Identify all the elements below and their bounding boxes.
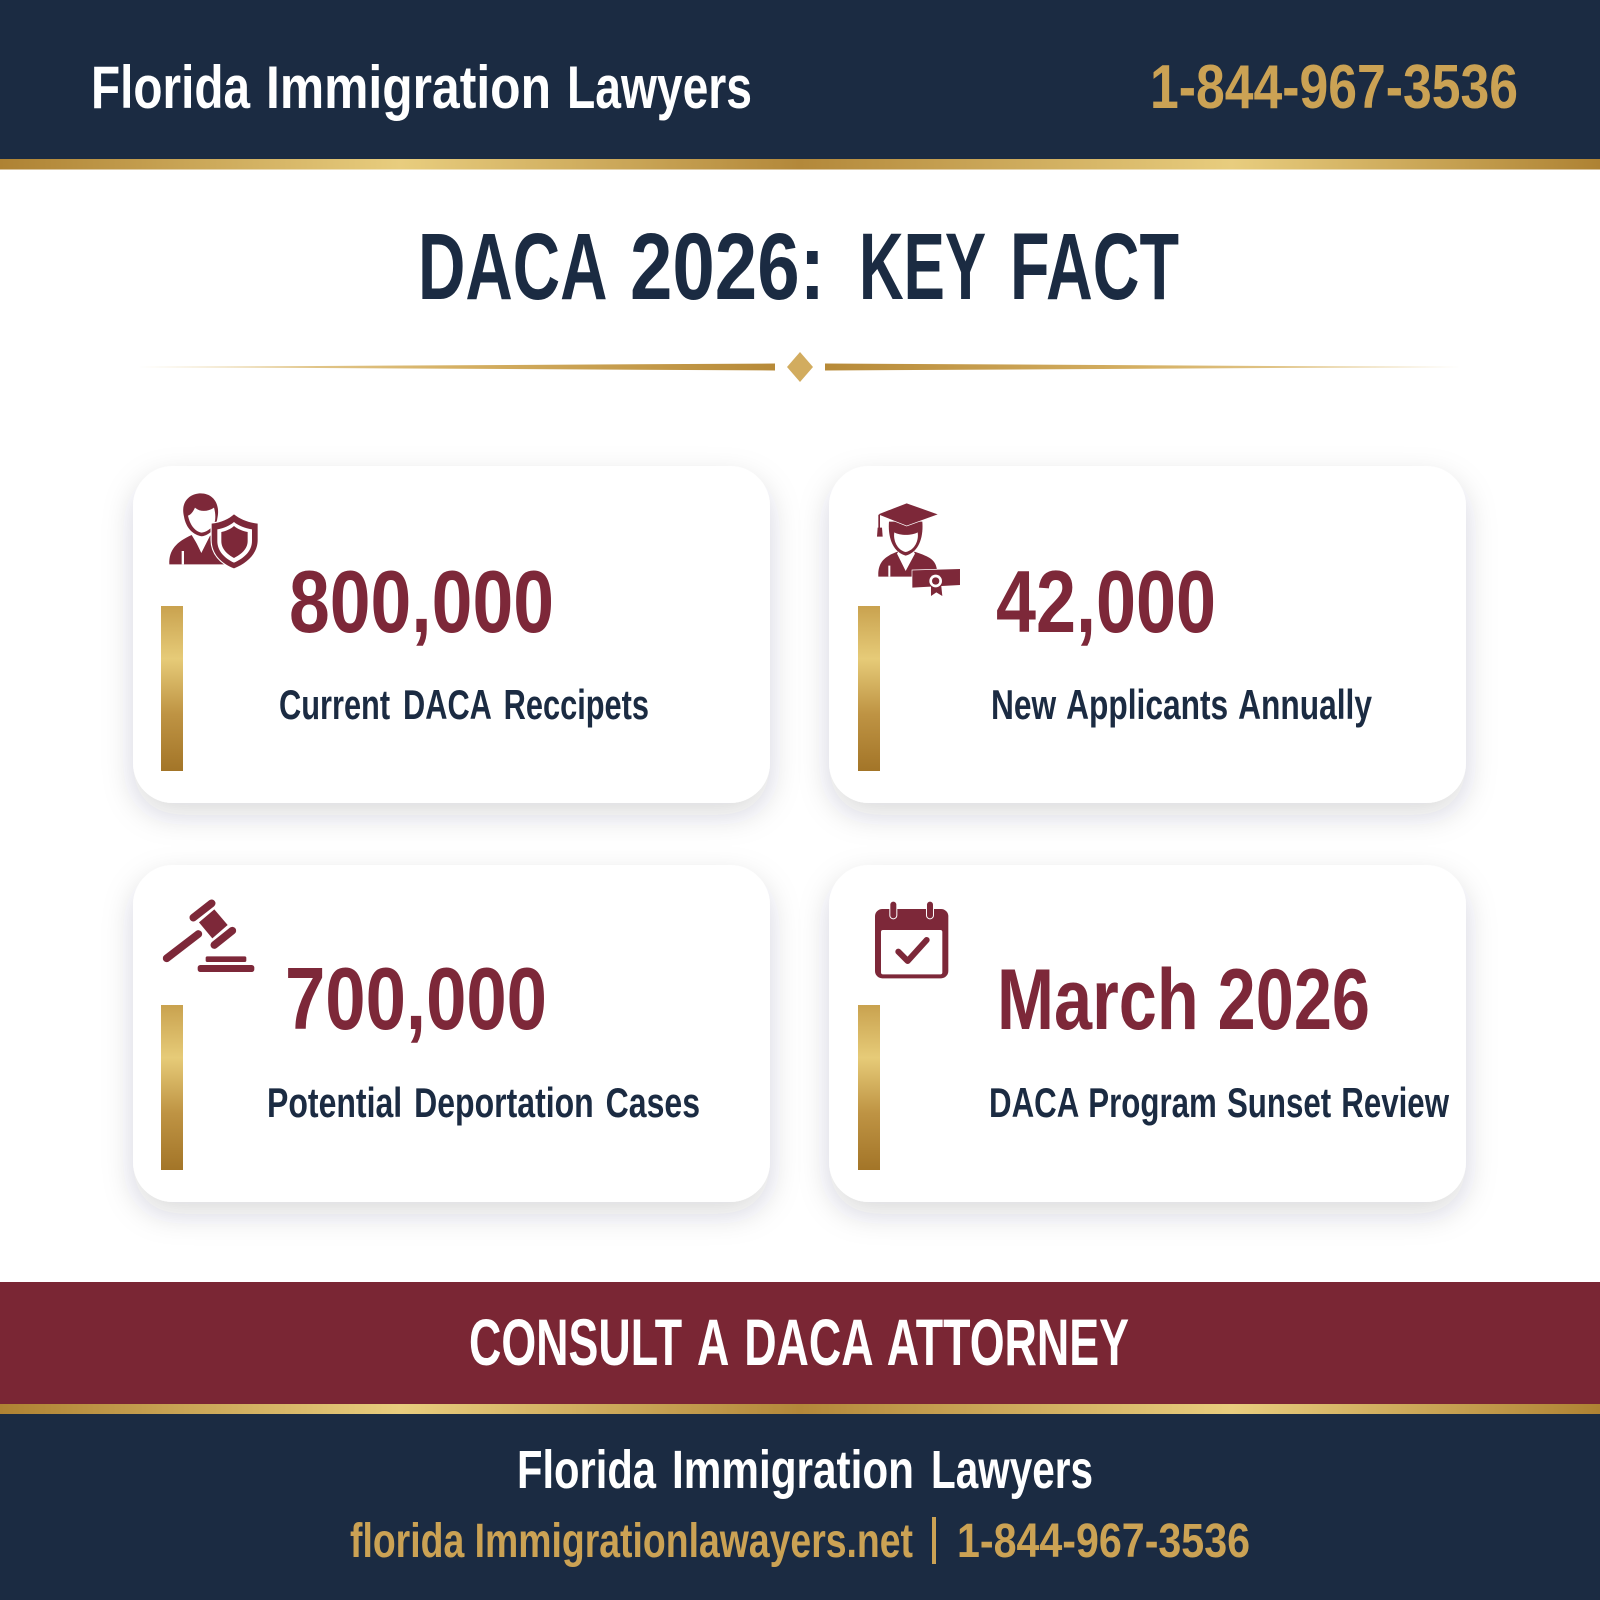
header band [0, 0, 1600, 170]
statistic: 42,000 [996, 552, 1216, 651]
footer firm name: Florida [517, 1440, 657, 1500]
panel: current recipients [133, 466, 770, 803]
icon: graduate with diploma [877, 503, 960, 596]
title: DACA [418, 214, 606, 320]
statistic: 800,000 [289, 552, 554, 651]
gold accent bar [858, 1005, 880, 1170]
gold accent bar [161, 606, 183, 771]
statistic: March 2026 [997, 952, 1370, 1048]
icon: calendar with check [875, 902, 948, 978]
statistic label: New Applicants Annually [991, 681, 1372, 728]
gold accent bar [161, 1005, 183, 1170]
call to action text: CONSULT A DACA ATTORNEY [469, 1305, 1129, 1379]
footer [0, 1404, 1600, 1600]
icon: gavel [167, 903, 254, 972]
header phone number: 1-844-967-3536 [1150, 53, 1518, 122]
header firm name: Immigration [266, 54, 551, 121]
footer phone: 1-844-967-3536 [957, 1515, 1250, 1568]
title: FACT [1010, 214, 1179, 320]
statistic label: DACA Program Sunset Review [989, 1079, 1449, 1126]
panel: sunset review [829, 865, 1466, 1202]
statistic: 700,000 [285, 949, 547, 1048]
panel: new applicants [829, 466, 1466, 803]
icon: person with shield [169, 493, 258, 568]
title: 2026: [630, 214, 825, 320]
statistic label: Potential Deportation Cases [267, 1079, 700, 1126]
header firm name: Florida [91, 54, 250, 121]
footer firm name: Lawyers [931, 1440, 1093, 1500]
gold accent bar [858, 606, 880, 771]
footer separator [932, 1517, 936, 1564]
footer website: florida Immigrationlawayers.net [350, 1515, 913, 1568]
title: KEY [859, 214, 985, 320]
title divider [138, 352, 1461, 382]
statistic label: Current DACA Reccipets [279, 681, 649, 728]
header firm name: Lawyers [567, 54, 752, 121]
footer firm name: Immigration [672, 1440, 914, 1500]
panel: deportation cases [133, 865, 770, 1202]
call to action band [0, 1282, 1600, 1404]
